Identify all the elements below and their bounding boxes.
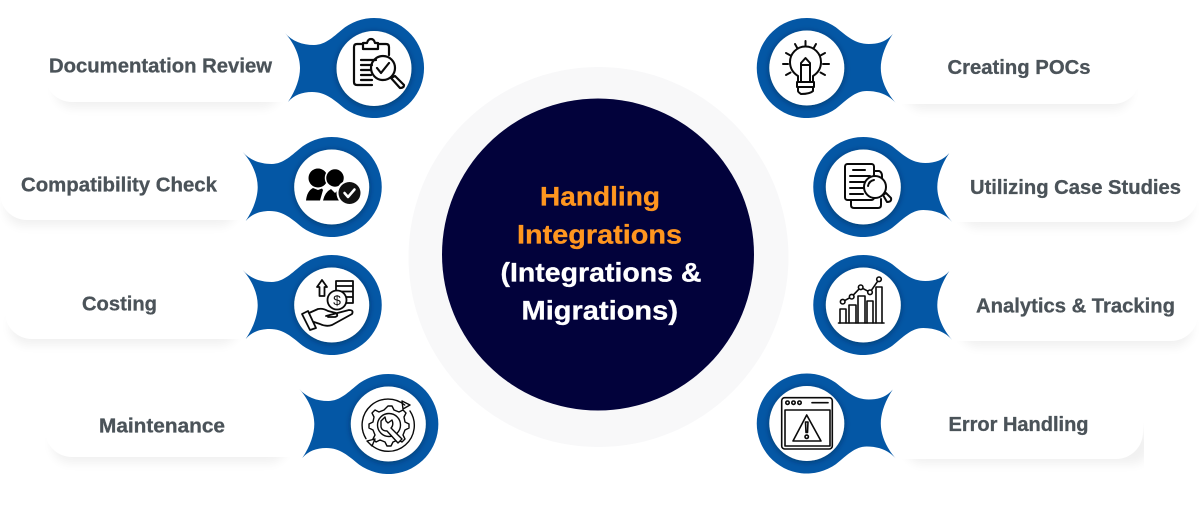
white icon disc (336, 31, 412, 106)
label: Maintenance (99, 416, 225, 438)
blue connector blob (757, 374, 896, 474)
blue connector blob (243, 255, 382, 355)
card (914, 434, 1144, 463)
icon: bar chart with trend line (838, 277, 884, 323)
label: Creating POCs (948, 57, 1090, 79)
card (45, 389, 335, 463)
white icon disc (294, 150, 369, 224)
card (915, 273, 1198, 347)
white icon disc (351, 386, 426, 462)
subheading: Integrations and Migrations: Migrations) (522, 296, 678, 326)
card (45, 34, 315, 108)
white icon disc (826, 268, 901, 342)
icon: browser window with warning (782, 398, 832, 449)
icon: hand with coins: $ (333, 292, 341, 308)
item: Analytics & Tracking (813, 255, 1198, 355)
blue connector blob (813, 137, 952, 237)
central hub (408, 67, 788, 447)
heading: Handling Integrations: Handling (540, 182, 660, 212)
label: Error Handling (948, 414, 1088, 436)
item: Utilizing Case Studies (813, 137, 1198, 237)
icon: light bulb with pencil (783, 41, 829, 94)
label: Compatibility Check (21, 174, 218, 196)
blue connector blob (813, 255, 952, 355)
white icon disc (826, 150, 901, 224)
item: Costing (5, 255, 382, 355)
label: Utilizing Case Studies (970, 177, 1181, 199)
icon: documents with magnifier (845, 164, 891, 208)
icon: hand with coins (302, 280, 353, 330)
blue connector blob (243, 137, 382, 237)
subheading: Integrations and Migrations: (Integrations & (500, 258, 702, 288)
outer pale ring (408, 67, 788, 447)
label: Costing (82, 294, 157, 316)
white icon disc (769, 30, 844, 106)
item: Documentation Review (45, 18, 424, 118)
label: Documentation Review (49, 56, 272, 78)
subheading: Integrations and Migrations (500, 258, 702, 326)
card (860, 36, 1140, 110)
item: Compatibility Check (0, 137, 382, 237)
item: Maintenance (45, 374, 438, 474)
icon: people with check badge (306, 168, 362, 206)
navy circle (442, 98, 754, 410)
icon: clipboard with magnifier (354, 39, 404, 88)
heading: Handling Integrations: Integrations (517, 220, 682, 250)
icon: gear and wrench with arrows (362, 399, 414, 451)
label: Analytics & Tracking (976, 296, 1175, 318)
blue connector blob (299, 374, 438, 474)
card (5, 271, 275, 345)
item: Creating POCs (757, 18, 1140, 118)
blue connector blob (757, 18, 896, 118)
card (915, 154, 1198, 228)
heading: Handling Integrations (517, 182, 682, 250)
card (0, 152, 275, 226)
item: Error Handling (757, 374, 1150, 474)
white icon disc (769, 386, 844, 461)
white icon disc (294, 268, 369, 342)
blue connector blob (285, 18, 424, 118)
